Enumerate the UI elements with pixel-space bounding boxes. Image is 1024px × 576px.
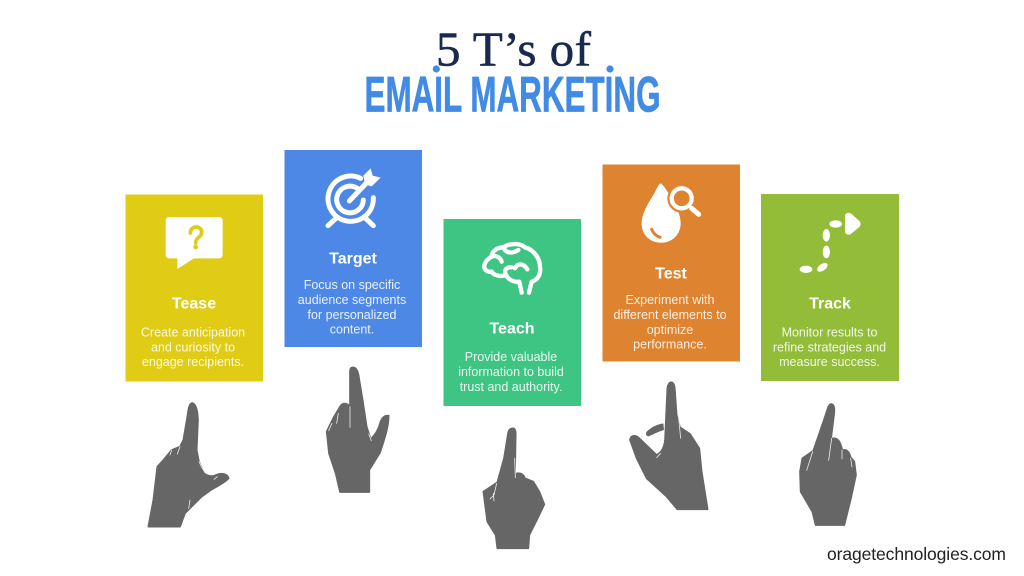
hand: under Tease: [148, 403, 229, 527]
text: Tease description: Create anticipation: [141, 326, 245, 340]
text: Test description: different elements to: [613, 308, 727, 322]
panel: Target: [284, 150, 422, 347]
hand: under Teach: [483, 428, 544, 548]
hand: under Track: [800, 404, 856, 525]
panel: Tease: [126, 194, 263, 382]
hand: under Test: [630, 382, 708, 509]
icon: brain: [484, 244, 540, 293]
heading: Test: Test: [655, 266, 688, 282]
text: Track description: Monitor results to: [782, 326, 877, 340]
text: Test description: [613, 293, 727, 352]
text: Teach description: Provide valuable: [465, 350, 557, 364]
heading: Track: Track: [809, 296, 851, 312]
panel: Track: [761, 194, 899, 381]
panel: Teach: [444, 219, 581, 406]
icon: question speech bubble: [166, 217, 223, 269]
text: Target description: [298, 278, 406, 336]
heading: Tease: Tease: [172, 296, 216, 312]
heading: Email Marketing: EMAIL MARKETING: [364, 66, 660, 122]
hand: under Target: [327, 367, 389, 492]
text: Test description: optimize: [647, 323, 693, 337]
text: Target description: audience segments: [298, 293, 406, 307]
heading: Email Marketing: [364, 65, 660, 122]
footer: website: oragetechnologies.com: [827, 544, 1006, 564]
text: Track description: [773, 326, 886, 369]
text: Target description: content.: [330, 322, 374, 336]
text: Track description: refine strategies and: [773, 340, 886, 354]
text: Teach description: [458, 350, 564, 394]
title: 5 T's of: 5 T’s of: [436, 22, 592, 76]
text: Track description: measure success.: [779, 355, 880, 369]
text: Tease description: engage recipients.: [142, 355, 244, 369]
icon: dotted path with arrowhead: [800, 213, 861, 274]
text: Teach description: trust and authority.: [460, 380, 562, 394]
icon: drop with magnifier: [642, 183, 699, 243]
heading: Target: Target: [329, 250, 378, 268]
text: Tease description: and curiosity to: [151, 340, 235, 354]
text: Tease description: [141, 326, 245, 369]
text: Test description: Experiment with: [626, 293, 715, 307]
panel: Test: [602, 164, 740, 362]
heading: Teach: Teach: [489, 320, 535, 338]
text: Target description: Focus on specific: [304, 278, 400, 292]
text: Test description: performance.: [633, 338, 707, 352]
text: Teach description: information to build: [458, 365, 564, 379]
icon: target with arrow: [328, 168, 381, 226]
text: Target description: for personalized: [308, 308, 397, 322]
